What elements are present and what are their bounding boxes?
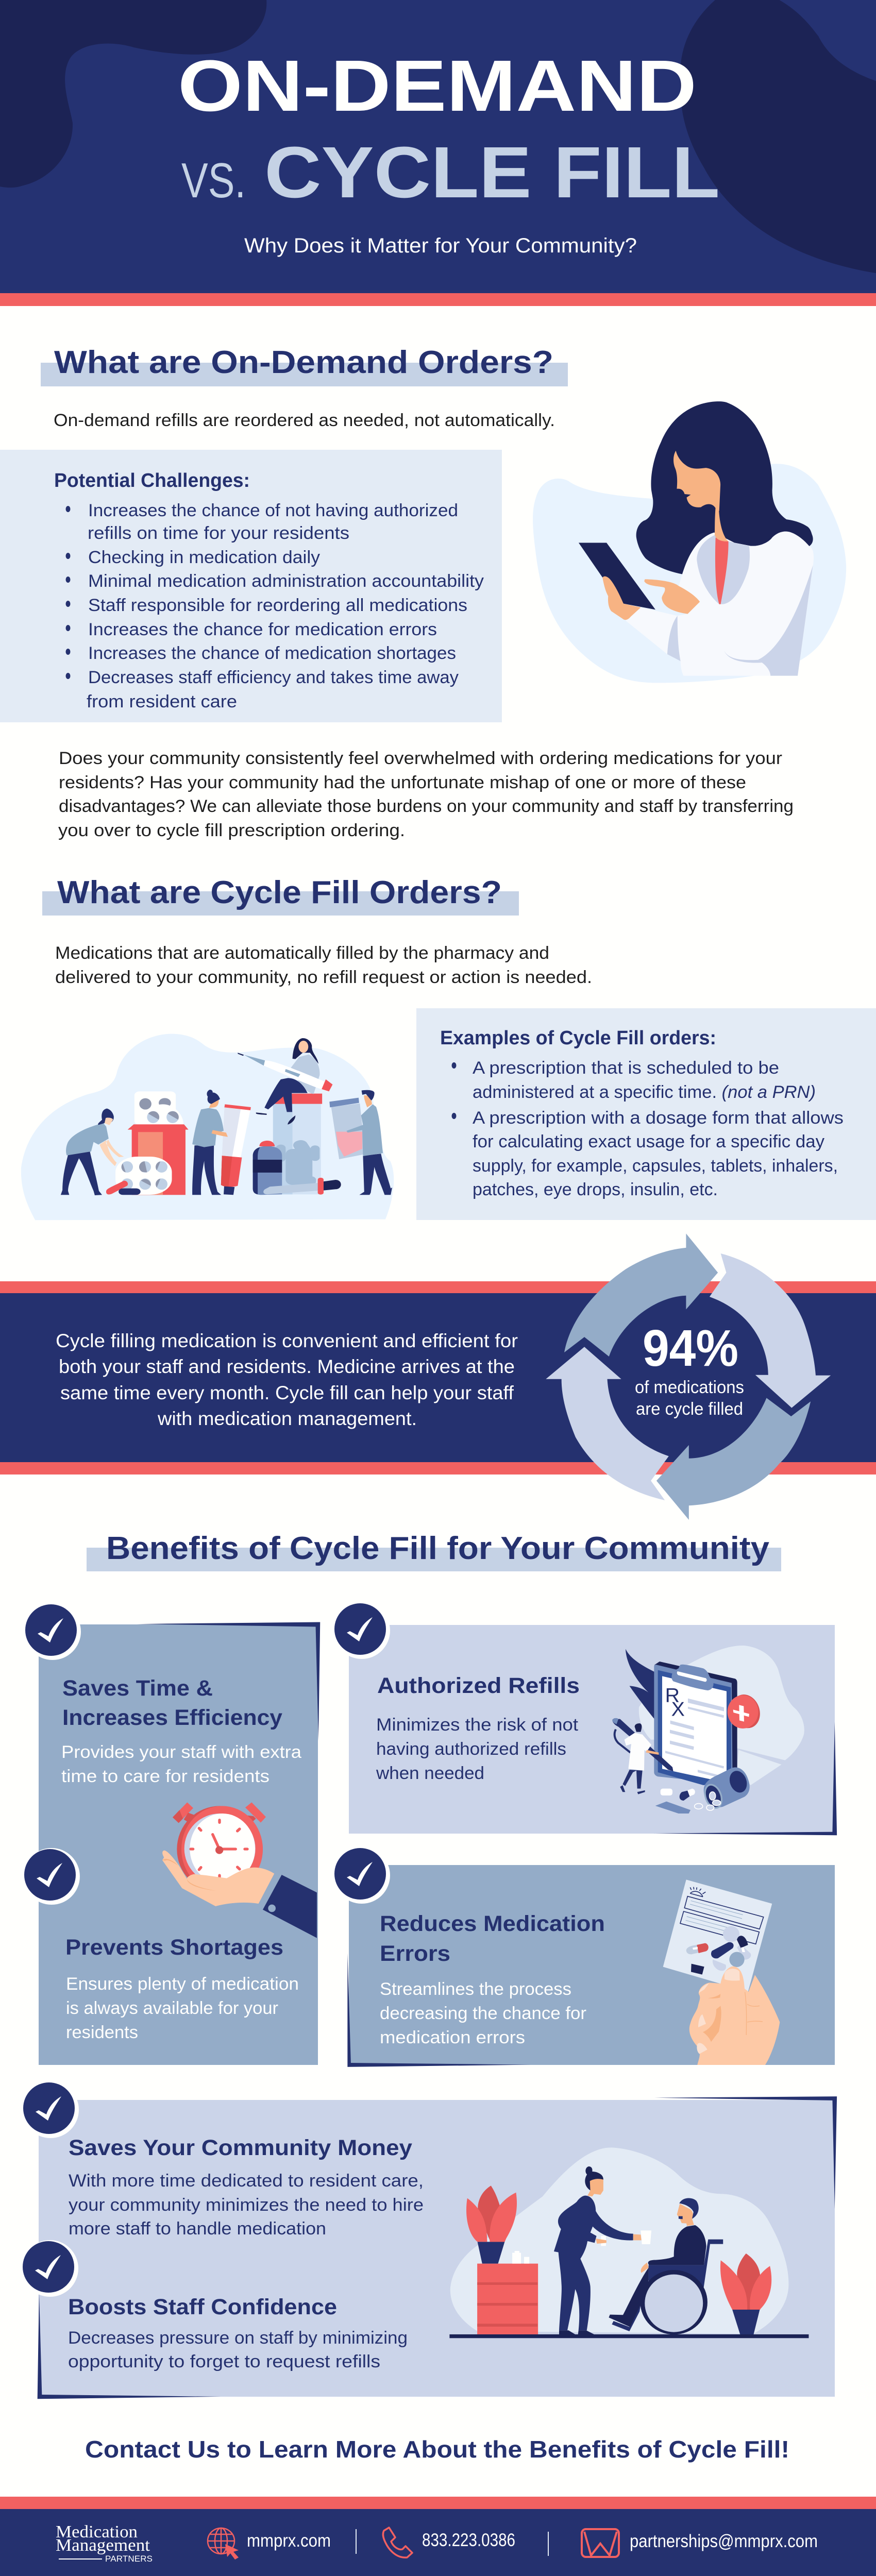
panel: cycle fill examples: A prescription that is scheduled to be bbox=[473, 1058, 779, 1078]
panel: potential challenges: from resident care bbox=[87, 692, 237, 711]
card: authorized refills bbox=[349, 1625, 837, 1835]
panel: potential challenges: Minimal medication administration accountability bbox=[88, 571, 484, 591]
email address: partnerships@mmprx.com bbox=[630, 2531, 818, 2551]
heading: on-demand orders: What are On-Demand Orders? bbox=[54, 345, 553, 380]
heading: benefits: Benefits of Cycle Fill for Your Community bbox=[106, 1531, 770, 1566]
person bending bbox=[61, 1109, 124, 1195]
caregiver bbox=[554, 2166, 651, 2334]
text: prevents shortages bbox=[65, 1935, 299, 2042]
icon: email bbox=[582, 2529, 619, 2557]
illustration: clock in hand bbox=[162, 1802, 317, 1938]
text: saves time: time to care for residents bbox=[61, 1767, 269, 1786]
text: prevents shortages: is always available for your bbox=[66, 1998, 278, 2018]
paragraph: overwhelmed by ordering: Does your community consistently feel overwhelmed with ordering medications for your bbox=[59, 749, 782, 768]
stat: 94 percent: of medications bbox=[635, 1378, 744, 1397]
icon: checkmark authorized refills bbox=[333, 1602, 390, 1659]
paragraph: overwhelmed by ordering bbox=[58, 749, 794, 840]
card: authorized refills: Authorized Refills bbox=[377, 1673, 580, 1698]
icon: checkmark saves time bbox=[24, 1603, 81, 1660]
stat: 94 percent: are cycle filled bbox=[636, 1399, 743, 1419]
title: on-demand: ON-DEMAND bbox=[178, 45, 697, 126]
icon: checkmark saves money bbox=[22, 2081, 79, 2138]
logo: Management bbox=[56, 2536, 150, 2555]
card: reduces medication errors: Streamlines the process bbox=[380, 1979, 571, 1999]
text: saves money: With more time dedicated to resident care, bbox=[69, 2171, 424, 2191]
text: saves money: Saves Your Community Money bbox=[69, 2136, 412, 2160]
card: reduces medication errors: Errors bbox=[380, 1941, 450, 1966]
banner: cycle fill summary: same time every month. Cycle fill can help your staff bbox=[60, 1382, 514, 1403]
text: boosts confidence: Decreases pressure on staff by minimizing bbox=[68, 2328, 408, 2348]
illustration: prescription clipboard bbox=[612, 1646, 804, 1814]
panel: cycle fill examples: patches, eye drops, insulin, etc. bbox=[473, 1180, 718, 1199]
illustration: woman with tablet bbox=[533, 401, 846, 683]
cycle fill definition bbox=[55, 943, 592, 987]
card: authorized refills: having authorized refills bbox=[376, 1739, 566, 1759]
text: prevents shortages: Ensures plenty of medication bbox=[66, 1974, 299, 1994]
large pill jar bbox=[273, 1094, 322, 1194]
paragraph: overwhelmed by ordering: residents? Has your community had the unfortunate mishap of one or more of these bbox=[59, 773, 746, 792]
icon: phone bbox=[383, 2528, 412, 2557]
text: boosts confidence bbox=[68, 2295, 408, 2371]
cycle fill definition: Medications that are automatically filled by the pharmacy and bbox=[55, 943, 549, 963]
banner: cycle fill summary: Cycle filling medication is convenient and efficient for bbox=[56, 1330, 518, 1351]
card: authorized refills: Minimizes the risk of not bbox=[376, 1715, 579, 1735]
cycle fill definition: delivered to your community, no refill request or action is needed. bbox=[55, 968, 592, 987]
panel: potential challenges: Staff responsible for reordering all medications bbox=[88, 596, 467, 615]
panel: potential challenges: Decreases staff efficiency and takes time away bbox=[88, 668, 459, 687]
icon: checkmark reduces errors bbox=[333, 1847, 390, 1904]
icon: globe bbox=[208, 2528, 239, 2560]
decorative header blobs bbox=[0, 0, 876, 273]
text: prevents shortages: residents bbox=[66, 2023, 138, 2042]
illustration: caregiver and resident in wheelchair bbox=[449, 2147, 808, 2338]
card: saves money and boosts confidence bbox=[38, 2096, 837, 2399]
card: reduces medication errors bbox=[347, 1865, 835, 2067]
logo bbox=[56, 2522, 153, 2564]
card: authorized refills: when needed bbox=[376, 1764, 484, 1783]
medicine bottle and dropper bbox=[253, 1141, 341, 1195]
logo: Medication bbox=[56, 2522, 138, 2541]
text: saves money: more staff to handle medication bbox=[69, 2219, 326, 2239]
text: boosts confidence: opportunity to forget to request refills bbox=[68, 2352, 380, 2371]
seated person with thermometer bbox=[238, 1038, 332, 1125]
icon: cycle arrows bbox=[546, 1233, 831, 1520]
logo: PARTNERS bbox=[105, 2554, 153, 2564]
heading: cycle fill orders: What are Cycle Fill Orders? bbox=[57, 875, 502, 910]
card: reduces medication errors: decreasing the chance for bbox=[380, 2004, 586, 2023]
header banner bbox=[0, 0, 876, 294]
panel: cycle fill examples: administered at a specific time. (not a PRN) bbox=[473, 1082, 816, 1102]
illustration: prescription clipboard: X bbox=[671, 1698, 685, 1721]
panel: cycle fill examples: Examples of Cycle Fill orders: bbox=[440, 1027, 716, 1049]
paragraph: overwhelmed by ordering: you over to cycle fill prescription ordering. bbox=[58, 821, 405, 840]
panel: potential challenges: Increases the chance of medication shortages bbox=[88, 643, 456, 663]
header coral stripe bbox=[0, 293, 876, 306]
panel: potential challenges: refills on time for your residents bbox=[88, 523, 349, 543]
call to action: Contact Us to Learn More About the Benefits of Cycle Fill! bbox=[85, 2436, 789, 2463]
text: saves money: your community minimizes the need to hire bbox=[69, 2195, 424, 2215]
website: mmprx.com bbox=[247, 2531, 331, 2551]
subtitle: Why Does it Matter for Your Community? bbox=[244, 234, 637, 257]
text: saves time bbox=[61, 1676, 301, 1786]
panel: cycle fill examples: A prescription with a dosage form that allows bbox=[473, 1108, 844, 1128]
person holding pill jar bbox=[329, 1090, 392, 1195]
stat: 94 percent: 94% bbox=[643, 1319, 738, 1377]
footer bbox=[0, 2497, 876, 2576]
text: prevents shortages: Prevents Shortages bbox=[65, 1935, 283, 1960]
banner: cycle fill summary bbox=[0, 1281, 876, 1475]
panel: potential challenges: Increases the chance of not having authorized bbox=[88, 501, 458, 520]
text: saves time: Increases Efficiency bbox=[62, 1705, 282, 1730]
text: saves time: Saves Time & bbox=[62, 1676, 213, 1701]
icon: checkmark boosts confidence bbox=[22, 2240, 78, 2297]
text: saves money bbox=[69, 2136, 424, 2239]
illustration: pharmacy team with giant medications bbox=[21, 1034, 394, 1220]
icon: checkmark prevents shortages bbox=[23, 1848, 80, 1905]
text: boosts confidence: Boosts Staff Confidence bbox=[68, 2295, 337, 2319]
card: reduces medication errors: medication errors bbox=[380, 2028, 525, 2047]
phone number: 833.223.0386 bbox=[422, 2530, 515, 2550]
panel: cycle fill examples: supply, for example, capsules, tablets, inhalers, bbox=[473, 1156, 838, 1176]
panel: cycle fill examples bbox=[416, 1008, 876, 1220]
title: cycle fill: CYCLE FILL bbox=[264, 131, 720, 213]
paragraph: overwhelmed by ordering: disadvantages? We can alleviate those burdens on your community and staff by transferring bbox=[59, 796, 794, 816]
card: saves time and prevents shortages bbox=[39, 1622, 320, 2065]
illustration: prescription clipboard: R bbox=[665, 1684, 680, 1706]
panel: potential challenges: Checking in medication daily bbox=[88, 548, 320, 567]
stat: 94 percent bbox=[635, 1319, 744, 1419]
banner: cycle fill summary: with medication management. bbox=[157, 1408, 417, 1429]
panel: potential challenges: Potential Challenges: bbox=[54, 470, 250, 492]
panel: potential challenges: Increases the chance for medication errors bbox=[88, 620, 437, 639]
person with ointment tube bbox=[192, 1090, 251, 1195]
panel: cycle fill examples: for calculating exact usage for a specific day bbox=[473, 1132, 824, 1151]
panel: potential challenges bbox=[0, 450, 502, 722]
title: vs.: VS. bbox=[181, 153, 246, 208]
resident in wheelchair bbox=[609, 2198, 723, 2334]
on-demand definition: On-demand refills are reordered as needed, not automatically. bbox=[54, 411, 555, 430]
illustration: hand holding prescription card bbox=[663, 1879, 780, 2065]
banner: cycle fill summary: both your staff and residents. Medicine arrives at the bbox=[59, 1356, 515, 1377]
card: reduces medication errors: Reduces Medication bbox=[380, 1911, 605, 1936]
text: saves time: Provides your staff with extra bbox=[61, 1742, 301, 1762]
